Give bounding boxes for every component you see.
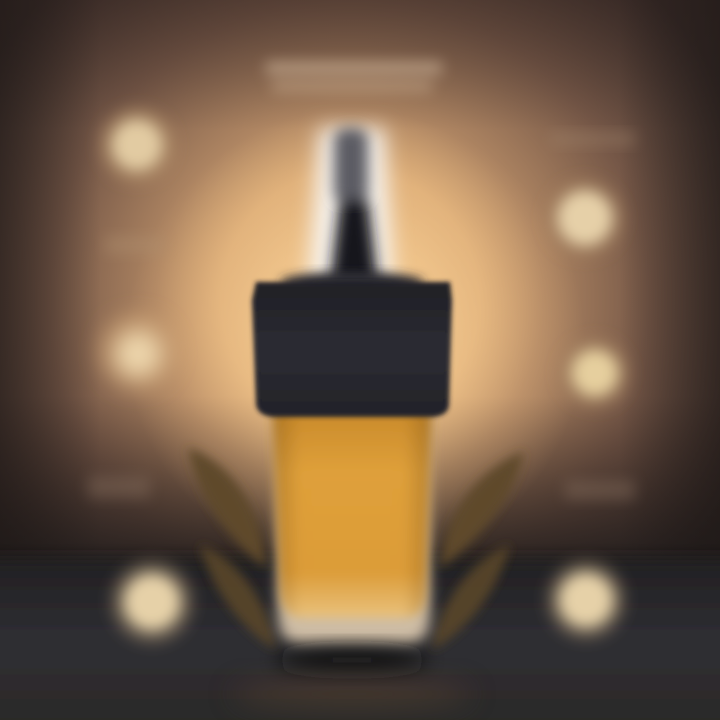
bottle contact shadow [276, 648, 428, 672]
icon: bottom right circle [546, 560, 626, 640]
label placeholder: lower right smudge [565, 480, 635, 500]
floor glow under bottle [232, 680, 472, 708]
bottle glass base [278, 410, 430, 645]
heading placeholder: illegible blurred title [266, 62, 442, 91]
bottle black cap [252, 282, 452, 417]
bottle dropper nozzle [330, 128, 378, 285]
bottle amber liquid [272, 410, 432, 618]
bottle neck glow [308, 128, 394, 285]
bottle shoulder shadow [280, 272, 424, 292]
icon: upper right circle [545, 178, 625, 258]
icon: bottom left circle [110, 560, 194, 644]
dark floor surface [0, 558, 720, 720]
decorative wheat right [432, 452, 524, 650]
label placeholder: upper right smudge [550, 132, 635, 146]
bottle [252, 128, 452, 645]
icon: middle right circle [559, 337, 631, 409]
label placeholder: lower left smudge [88, 476, 150, 498]
label placeholder: left smudge [105, 236, 165, 254]
icon: top left circle [99, 107, 175, 183]
decorative wheat left [188, 448, 276, 650]
icon: middle left circle [99, 314, 175, 390]
